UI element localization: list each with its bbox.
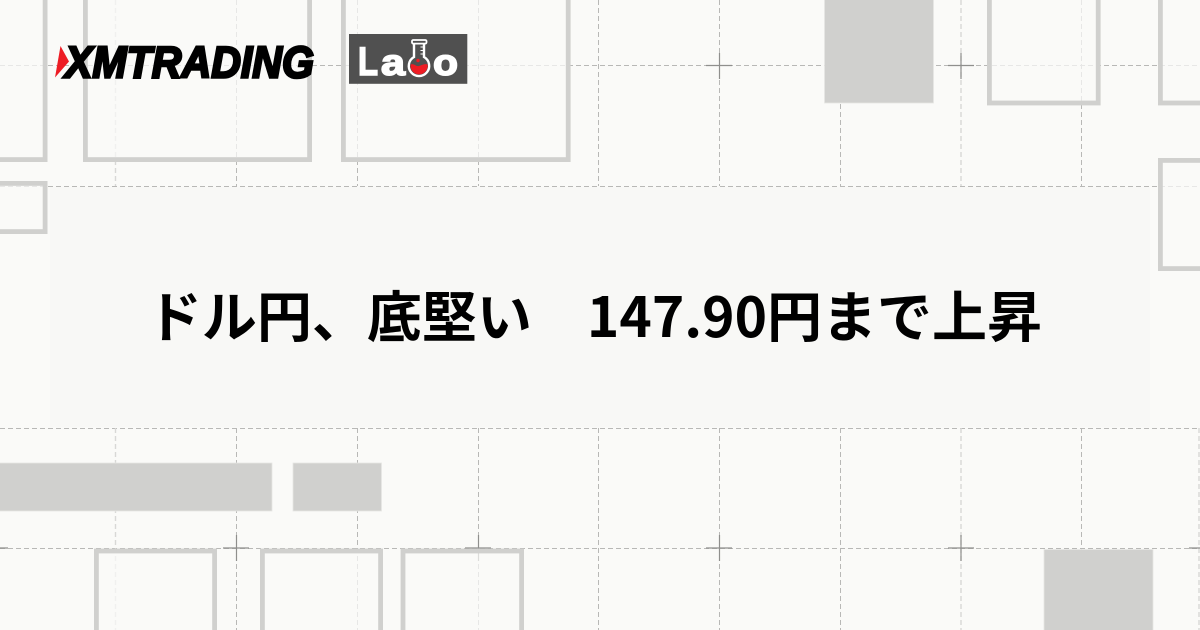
logo: Lab: o — [433, 42, 458, 83]
title: ドル円、底堅い 147.90円まで上昇 — [147, 273, 1042, 353]
logo: Lab: a — [381, 42, 405, 83]
panel: outlined rectangles, top row — [0, 0, 1200, 269]
logo: Lab: L — [358, 40, 378, 84]
panel: outlined rectangles, bottom row — [96, 551, 522, 630]
logo: XMTRADING: XMTRADING — [62, 38, 314, 87]
icon: flask — [409, 40, 429, 76]
icon: red arrowhead — [55, 46, 69, 78]
logo: Lab — [349, 34, 467, 84]
